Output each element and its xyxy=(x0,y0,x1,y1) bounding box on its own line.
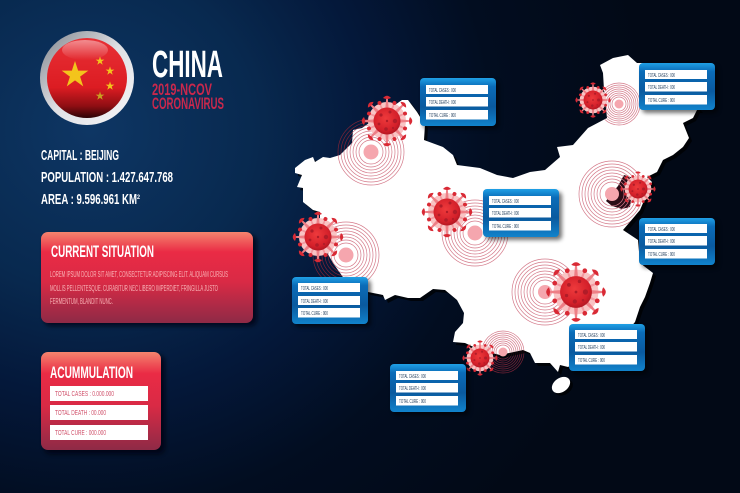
info box: east xyxy=(639,218,718,268)
body text: MOLLIS PELLENTESQUE. CURABITUR NEC LIBERO IMPERDIET, FRINGILLA JUSTO xyxy=(50,284,218,293)
bohai sea xyxy=(606,175,640,209)
info box: southeast: TOTAL CURE : 000 xyxy=(578,358,605,364)
ring centers xyxy=(338,100,624,356)
virus: center xyxy=(422,187,472,237)
info box: west xyxy=(292,277,371,327)
hainan island xyxy=(549,374,576,399)
country facts: POPULATION : 1.427.647.768 xyxy=(41,169,173,186)
virus: southeast xyxy=(546,262,606,322)
info box: northwest: TOTAL CASES : 000 xyxy=(429,88,456,94)
info box: west: TOTAL CURE : 000 xyxy=(301,311,328,317)
stat rows: TOTAL DEATH : 00.000 xyxy=(55,408,106,417)
info box: south: TOTAL CASES : 000 xyxy=(399,374,426,380)
info box: southeast xyxy=(569,324,648,374)
stat rows: TOTAL CASES : 0.000.000 xyxy=(55,389,114,398)
info box: east: TOTAL CURE : 000 xyxy=(648,252,675,258)
country facts: CAPITAL : BEIJING xyxy=(41,147,119,164)
info box: northeast: TOTAL CURE : 000 xyxy=(648,98,675,104)
virus: south xyxy=(462,340,498,376)
body text xyxy=(50,270,228,306)
virus: northwest xyxy=(362,96,412,146)
title: CHINA xyxy=(152,44,223,86)
country facts: 2 xyxy=(137,195,141,201)
china map xyxy=(295,55,703,399)
info box: center: TOTAL CASES : 000 xyxy=(492,199,519,205)
virus: north xyxy=(575,82,611,118)
info box: center xyxy=(483,189,562,240)
info box: south xyxy=(390,364,469,415)
stat rows xyxy=(50,386,148,440)
outbreak rings xyxy=(328,82,642,354)
virus: west xyxy=(293,212,343,262)
info box: west: TOTAL DEATH : 000 xyxy=(301,299,328,305)
info box: east: TOTAL DEATH : 000 xyxy=(648,239,675,245)
panel: current situation xyxy=(41,232,257,326)
info box: northwest: TOTAL CURE : 000 xyxy=(429,113,456,119)
body text: FERMENTUM, BLANDIT NUNC. xyxy=(50,297,113,306)
info box: west: TOTAL CASES : 000 xyxy=(301,286,328,292)
info box: northwest xyxy=(420,78,499,129)
title xyxy=(152,44,224,113)
info box: southeast: TOTAL CASES : 000 xyxy=(578,333,605,339)
body text: LOREM IPSUM DOLOR SIT AMET, CONSECTETUR ADIPISCING ELIT. ALIQUAM CURSUS xyxy=(50,270,228,279)
info box: center: TOTAL CURE : 000 xyxy=(492,224,519,230)
virus: east xyxy=(620,171,656,207)
info box: northwest: TOTAL DEATH : 000 xyxy=(429,100,456,106)
info box: south: TOTAL CURE : 000 xyxy=(399,399,426,405)
stat rows: TOTAL CURE : 000.000 xyxy=(55,428,106,437)
icon: china flag badge xyxy=(40,31,134,125)
info box: east: TOTAL CASES : 000 xyxy=(648,227,675,233)
rings over dark background xyxy=(313,119,524,373)
title: 2019-NCOV xyxy=(152,80,212,99)
heading: acummulation: ACUMMULATION xyxy=(50,363,133,382)
country facts: AREA : 9.596.961 KM xyxy=(41,191,137,208)
country facts xyxy=(41,147,173,208)
title: CORONAVIRUS xyxy=(152,94,224,113)
info box: southeast: TOTAL DEATH : 000 xyxy=(578,345,605,351)
panel: acummulation xyxy=(41,352,165,454)
info box: northeast: TOTAL DEATH : 000 xyxy=(648,85,675,91)
info box: center: TOTAL DEATH : 000 xyxy=(492,211,519,217)
info box: northeast xyxy=(639,63,718,113)
info box: south: TOTAL DEATH : 000 xyxy=(399,386,426,392)
heading: current situation: CURRENT SITUATION xyxy=(51,242,154,261)
info box: northeast: TOTAL CASES : 000 xyxy=(648,73,675,79)
